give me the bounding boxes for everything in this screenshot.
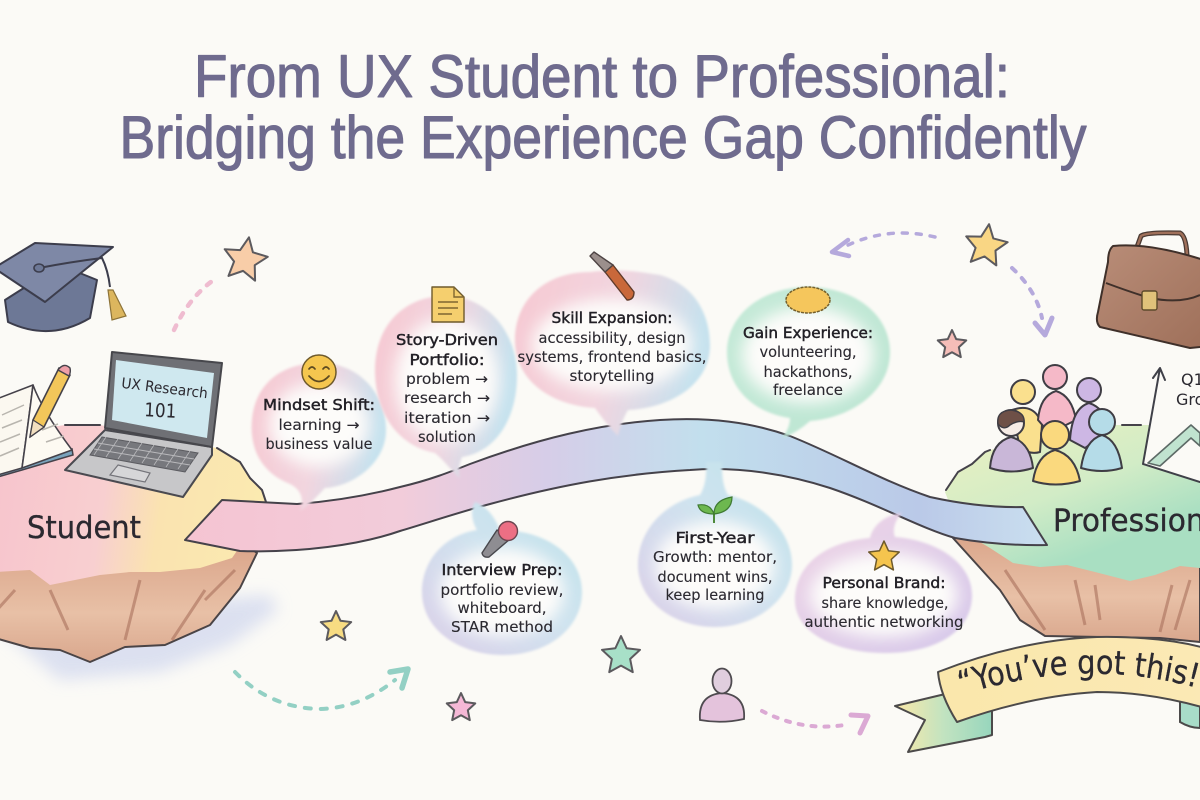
road bridge [185, 419, 1047, 551]
bubble: mindset shift [252, 355, 386, 511]
bubble: skill expansion: storytelling [570, 367, 654, 385]
arrow: teal dashed [235, 669, 408, 709]
laptop: UX Research [120, 376, 209, 402]
arrow: pink dashed [762, 711, 868, 733]
graduation cap [0, 243, 126, 331]
laptop [65, 352, 222, 497]
bubble: story-driven portfolio: Story-Driven [396, 331, 498, 349]
icon: sprout [698, 497, 732, 523]
bubble: gain experience: volunteering, [760, 343, 856, 361]
bubble: gain experience [727, 287, 890, 438]
bubble: story-driven portfolio: Portfolio: [410, 351, 484, 369]
bubble: mindset shift: Mindset Shift: [263, 396, 375, 414]
bubble: interview prep: whiteboard, [458, 599, 546, 617]
student island [0, 425, 278, 680]
bubble: first-year growth: document wins, [658, 568, 772, 586]
title: From UX Student to Professional: [194, 43, 1010, 110]
bubble: gain experience: Gain Experience: [743, 324, 873, 342]
banner: you've got this: “You’ve got this! [958, 651, 1198, 689]
arrow: lavender dashed right [1012, 268, 1052, 335]
icon: smiley [302, 355, 336, 389]
chart: Q1 growth [1143, 368, 1200, 482]
bubble: interview prep: portfolio review, [440, 581, 564, 599]
bubble: interview prep [422, 502, 582, 655]
bubble: mindset shift: business value [266, 435, 372, 453]
bubble: personal brand: Personal Brand: [822, 574, 946, 592]
briefcase [1097, 233, 1200, 348]
icon: pen [590, 252, 634, 300]
bubble: skill expansion: Skill Expansion: [552, 309, 672, 327]
title [120, 43, 1086, 171]
title: Bridging the Experience Gap Confidently [120, 104, 1086, 171]
bubble: first-year growth: Growth: mentor, [653, 548, 777, 566]
bubble: story-driven portfolio: problem → [406, 370, 488, 388]
laptop: 101 [144, 399, 177, 423]
bubble: story-driven portfolio [375, 287, 517, 478]
bubble: gain experience: freelance [773, 381, 843, 399]
bubble: personal brand: share knowledge, [822, 594, 948, 612]
bubble: story-driven portfolio: iteration → [404, 409, 490, 427]
team of people [990, 365, 1122, 484]
bubble: interview prep: STAR method [451, 618, 553, 636]
person icon [700, 668, 744, 722]
open book [0, 385, 73, 478]
bubble: personal brand [795, 513, 972, 653]
pencil [30, 365, 70, 437]
bubble: gain experience: hackathons, [764, 363, 852, 381]
bubble: story-driven portfolio: research → [404, 389, 490, 407]
arrow: lavender dashed top [832, 233, 935, 256]
bubble: mindset shift: learning → [278, 416, 360, 434]
bubble: first-year growth [638, 462, 792, 627]
decorative stars [321, 221, 1010, 720]
student label: Student [27, 510, 141, 546]
star and dotted path: pink [174, 234, 271, 330]
banner: you've got this [894, 636, 1200, 753]
bubble: interview prep: Interview Prep: [442, 561, 562, 579]
icon: document [432, 287, 464, 322]
bubble: first-year growth: First-Year [676, 529, 755, 547]
icon: star [869, 541, 899, 570]
icon: yellow tuft [786, 287, 830, 313]
bubble: skill expansion [515, 252, 710, 436]
bubble: personal brand: authentic networking [804, 613, 964, 631]
bubble: skill expansion: accessibility, design [538, 329, 686, 347]
bubble: story-driven portfolio: solution [418, 428, 476, 446]
bubble: first-year growth: keep learning [666, 586, 764, 604]
icon: microphone [482, 522, 518, 557]
professional island [945, 425, 1200, 642]
bubble: skill expansion: systems, frontend basics, [518, 348, 706, 366]
